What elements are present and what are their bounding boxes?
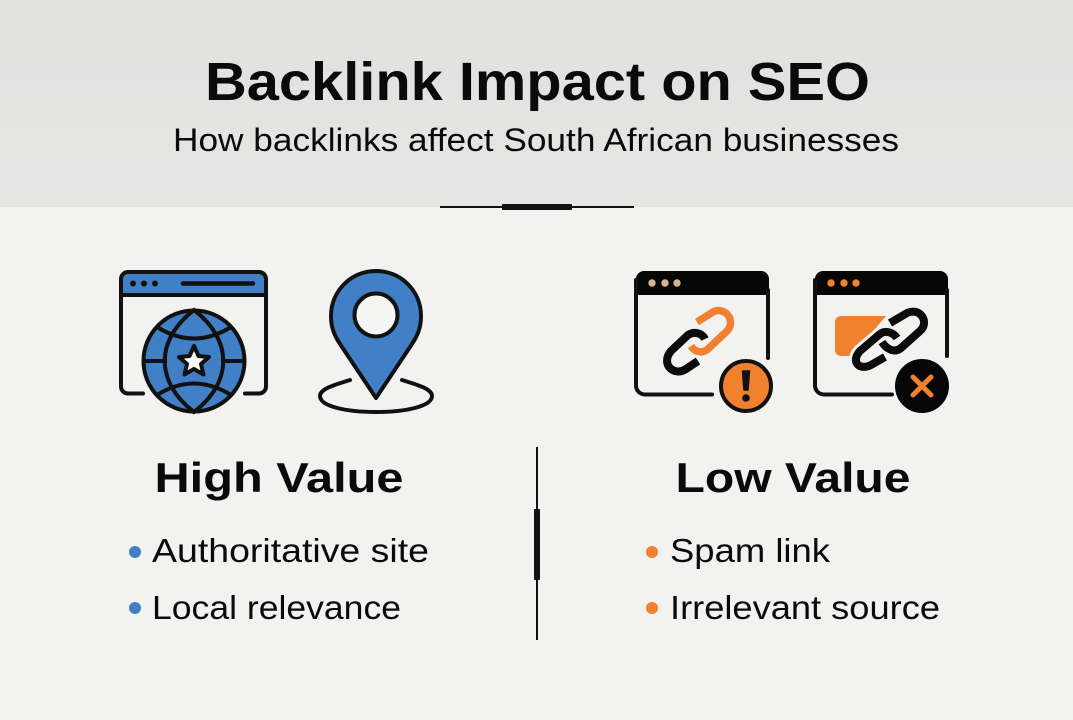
warning badge	[721, 361, 771, 411]
list: low value: Spam link	[670, 532, 831, 569]
globe	[143, 310, 245, 412]
chain halo	[856, 312, 924, 367]
orange link	[691, 311, 731, 352]
black link	[667, 333, 705, 371]
subtitle: How backlinks affect South African businesses	[173, 122, 899, 158]
list: high value: Authoritative site	[152, 532, 429, 569]
header divider	[440, 204, 634, 210]
orange card	[835, 316, 886, 356]
header band	[0, 0, 1073, 207]
icon: browser with spam link and cross	[815, 271, 949, 413]
heading: high value: High Value	[154, 454, 404, 501]
title: Backlink Impact on SEO	[205, 52, 870, 112]
list: low value	[646, 532, 940, 626]
icon: browser window with globe and star	[121, 271, 266, 412]
chain	[856, 312, 924, 367]
icon: browser with broken chain and warning	[636, 271, 771, 411]
heading: low value: Low Value	[676, 454, 910, 501]
list: high value: Local relevance	[152, 589, 401, 626]
list: high value	[129, 532, 429, 626]
vertical divider	[534, 447, 540, 640]
cross badge	[895, 359, 949, 413]
icon: location pin	[320, 271, 432, 412]
list: low value: Irrelevant source	[670, 589, 940, 626]
icon: star	[179, 346, 209, 374]
